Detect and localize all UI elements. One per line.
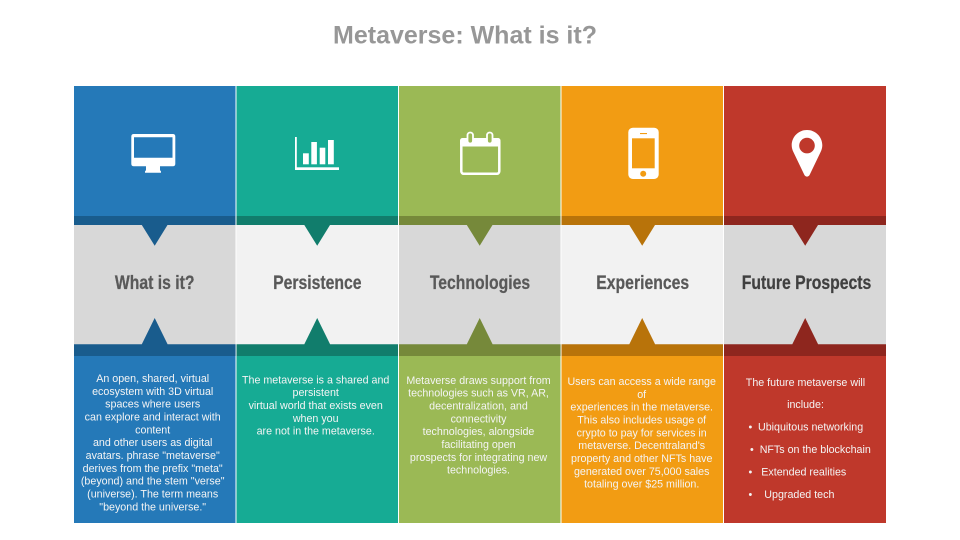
body text: technologies, alongside [423,426,534,438]
body colour block [399,356,560,523]
top colour block [236,86,398,216]
body text [242,374,389,438]
heading band [236,225,398,344]
body text and bullets: Ubiquitous networking [758,422,863,434]
top dark band and pointer [74,216,236,246]
body text: property and other NFTs have [571,453,712,465]
heading band [724,225,886,344]
lower dark band and pointer [74,318,236,356]
body text: decentralization, and [429,400,528,412]
body text and bullets [746,377,871,501]
body text: generated over 75,000 sales [574,466,709,478]
body text: of [637,389,646,401]
body text [81,373,225,513]
body text: derives from the prefix "meta" [83,463,223,475]
top colour block [724,86,886,216]
top colour block [399,86,560,216]
top dark band and pointer [399,216,560,246]
body text and bullets: NFTs on the blockchain [760,444,871,456]
heading: Experiences [596,272,689,293]
heading: Future Prospects [742,272,871,293]
heading band [399,225,560,344]
body colour block [236,356,398,523]
heading: What is it? [115,272,195,293]
body text: Users can access a wide range [567,376,716,388]
panel: Technologies [399,86,561,523]
body text: prospects for integrating new [410,452,547,464]
top colour block [562,86,723,216]
body text: and other users as digital [93,437,212,449]
body text and bullets: • [748,489,752,501]
body text: connectivity [451,413,507,425]
panel: Experiences [562,86,723,523]
body text: totaling over $25 million. [584,479,699,491]
body text and bullets: • [750,444,754,456]
heading: Persistence [273,272,362,293]
lower dark band and pointer [562,318,723,356]
body text: content [135,424,170,436]
lower dark band and pointer [724,318,886,356]
icon: smartphone [628,128,659,179]
body text and bullets: Extended realities [761,466,846,478]
body text and bullets: • [748,422,752,434]
top dark band and pointer [236,216,398,246]
icon: monitor [131,134,175,173]
body colour block [74,356,236,523]
icon: bar chart [295,137,339,170]
lower dark band and pointer [399,318,561,356]
body text and bullets: • [748,466,752,478]
icon: map pin [792,130,822,177]
body text: facilitating open [441,439,516,451]
body text: spaces where users [105,399,200,411]
body text [567,376,716,491]
body text: technologies such as VR, AR, [408,388,549,400]
body text: persistent [293,387,339,399]
body text: virtual world that exists even [249,400,383,412]
body text: ecosystem with 3D virtual [92,386,213,398]
heading band [74,225,236,344]
top dark band and pointer [562,216,723,246]
body text and bullets: include: [787,399,824,411]
body text and bullets: Upgraded tech [764,489,834,501]
body colour block [562,356,723,523]
body text: The metaverse is a shared and [242,374,389,386]
heading band [562,225,723,344]
heading: Technologies [430,272,530,293]
panel: Future Prospects [724,86,886,523]
body text: are not in the metaverse. [257,426,375,438]
body text and bullets: The future metaverse will [746,377,865,389]
body text: avatars. phrase "metaverse" [86,450,220,462]
body text: when you [292,413,339,425]
top colour block [74,86,236,216]
top dark band and pointer [724,216,886,246]
panel: What is it? [74,86,236,523]
lower dark band and pointer [236,318,398,356]
body text: experiences in the metaverse. [570,402,713,414]
icon: calendar [460,132,500,174]
body text: (universe). The term means [87,488,218,500]
body text: An open, shared, virtual [96,373,209,385]
body text [406,375,551,477]
title: Metaverse: What is it? [333,22,597,50]
body text: crypto to pay for services in [577,427,707,439]
body text: Metaverse draws support from [406,375,551,387]
body text: can explore and interact with [85,412,221,424]
body text: metaverse. Decentraland's [578,440,705,452]
body text: technologies. [447,465,510,477]
panel: Persistence [236,86,398,523]
body text: This also includes usage of [577,414,706,426]
body text: (beyond) and the stem "verse" [81,476,225,488]
body colour block [724,356,886,523]
body text: "beyond the universe." [99,501,206,513]
